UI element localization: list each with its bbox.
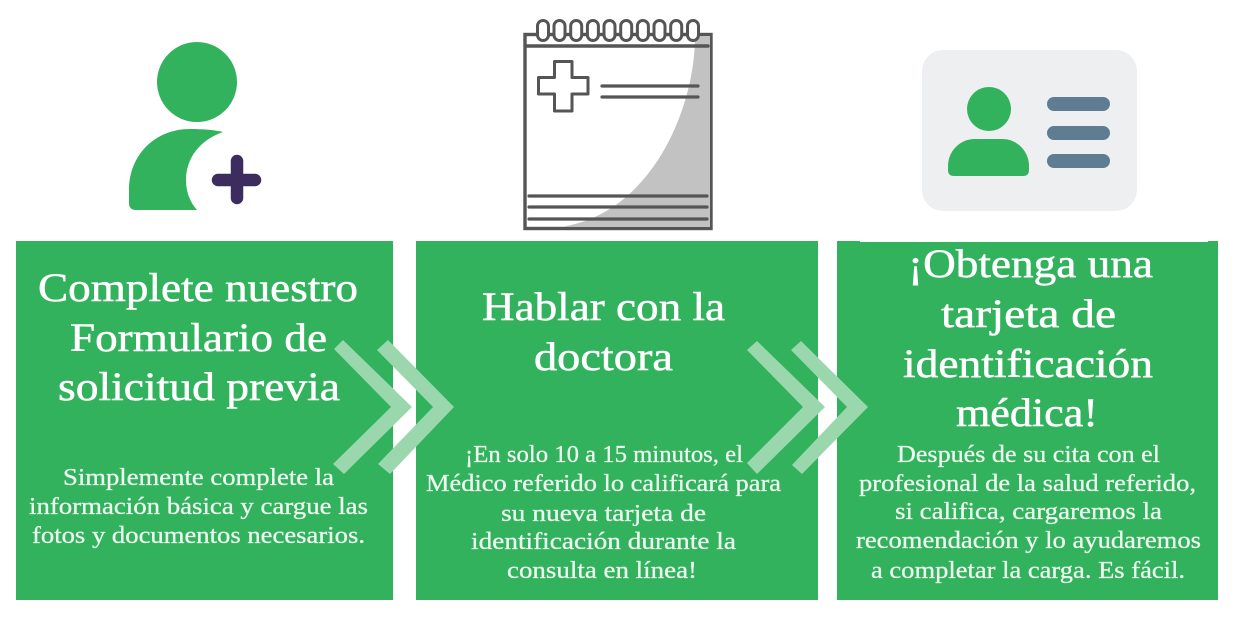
body text: step 3: si califica, cargaremos la [895, 498, 1162, 525]
heading: step 2: Hablar con la [482, 284, 725, 329]
arrow: double chevron between steps 1 and 2 [333, 340, 454, 474]
body text: step 3: Después de su cita con el [897, 441, 1160, 468]
heading: step 2 [482, 284, 725, 379]
body text: step 2: identificación durante la [471, 528, 736, 555]
heading: step 3: tarjeta de [941, 291, 1116, 336]
heading: step 1 [38, 265, 358, 409]
body text: step 1 [29, 464, 368, 549]
body text: step 2: Médico referido lo calificará para [426, 470, 781, 497]
heading: step 3: identificación [903, 341, 1153, 386]
body text: step 3: a completar la carga. Es fácil. [871, 557, 1185, 584]
heading: step 2: doctora [534, 334, 673, 379]
panel: step 3 [837, 241, 1218, 600]
body text: step 2: consulta en línea! [507, 557, 697, 584]
panel: step 1 [16, 241, 393, 600]
arrow: double chevron between steps 2 and 3 [747, 341, 868, 474]
body text: step 1: información básica y cargue las [29, 493, 368, 520]
heading: step 3: médica! [956, 390, 1098, 435]
icon: medical notepad [525, 20, 711, 228]
heading: step 1: solicitud previa [58, 364, 340, 409]
panel background [837, 241, 1218, 600]
body text: step 2: ¡En solo 10 a 15 minutos, el [465, 441, 743, 468]
panel: step 2 [416, 241, 818, 600]
body text: step 1: fotos y documentos necesarios. [32, 522, 365, 549]
heading: step 3 [903, 241, 1153, 435]
body text: step 3: recomendación y lo ayudaremos [856, 527, 1201, 554]
heading: step 1: Complete nuestro [38, 265, 358, 310]
body text: step 3: profesional de la salud referido, [859, 470, 1196, 497]
heading: step 3: ¡Obtenga una [908, 241, 1153, 286]
panel background [16, 241, 393, 600]
icon: person with plus [129, 42, 255, 210]
body text: step 2 [426, 441, 781, 584]
heading: step 1: Formulario de [70, 315, 327, 360]
body text: step 3 [856, 441, 1201, 584]
icon: ID card [922, 50, 1137, 211]
panel background [416, 241, 818, 600]
body text: step 1: Simplemente complete la [63, 464, 334, 491]
body text: step 2: su nueva tarjeta de [501, 500, 706, 527]
